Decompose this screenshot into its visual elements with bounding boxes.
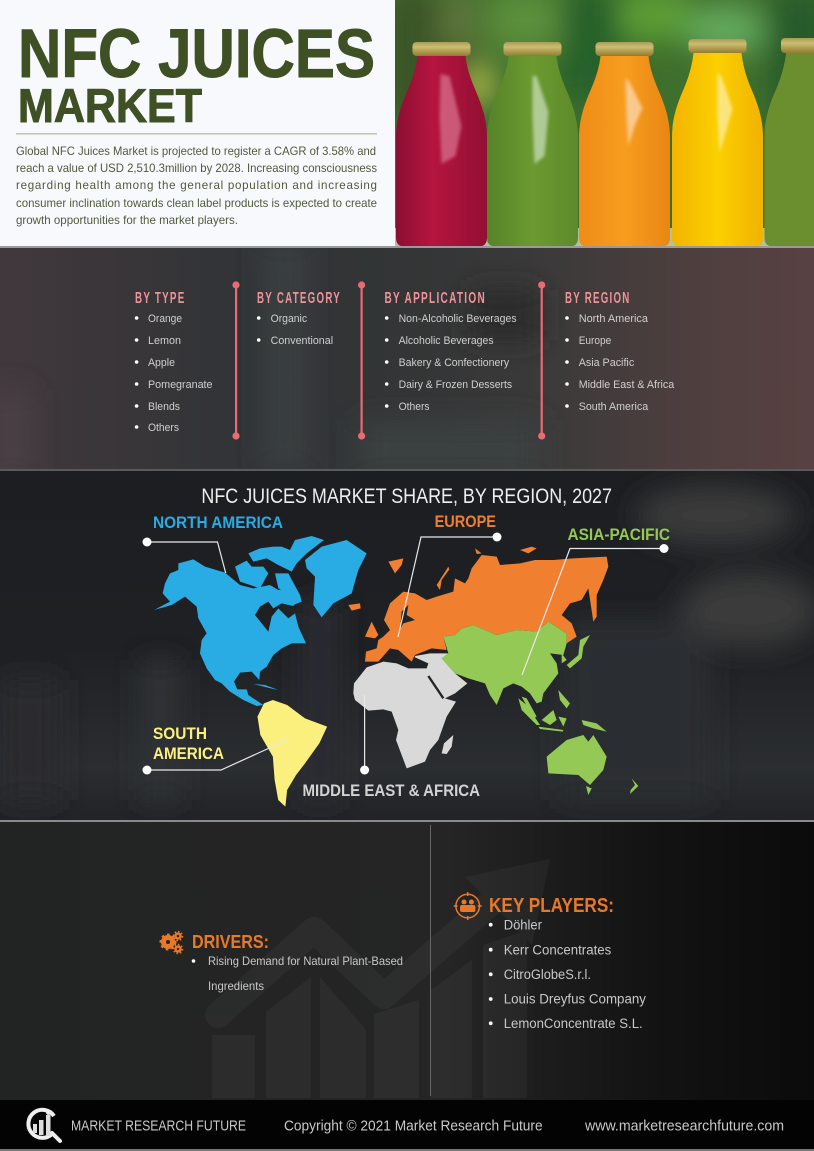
footer bbox=[0, 1100, 814, 1151]
column: by application bbox=[384, 290, 517, 413]
column: by type: Blends bbox=[148, 401, 180, 413]
intro paragraph bbox=[16, 145, 377, 227]
website: www.marketresearchfuture.com bbox=[584, 1118, 784, 1134]
brand name: MARKET RESEARCH FUTURE bbox=[71, 1118, 246, 1134]
key players block bbox=[454, 892, 646, 1031]
title: MARKET bbox=[18, 79, 202, 132]
column: by category: Organic bbox=[271, 313, 308, 325]
watermark: growth chart bbox=[212, 859, 550, 1098]
column: by type: Pomegranate bbox=[148, 379, 212, 391]
label: north america bbox=[142, 514, 283, 573]
column: by type: BY TYPE bbox=[135, 290, 186, 307]
label: asia-pacific: ASIA-PACIFIC bbox=[568, 526, 670, 544]
column: by application: Non-Alcoholic Beverages bbox=[399, 313, 517, 325]
world map bbox=[154, 536, 638, 807]
column: by region: BY REGION bbox=[565, 290, 630, 307]
map title: NFC JUICES MARKET SHARE, BY REGION, 2027 bbox=[201, 485, 612, 508]
key players list: LemonConcentrate S.L. bbox=[504, 1016, 643, 1031]
column: by type: Apple bbox=[148, 357, 175, 369]
column: by type: Others bbox=[148, 422, 179, 434]
driver list: Ingredients bbox=[208, 979, 264, 993]
title: NFC JUICES bbox=[18, 15, 375, 92]
map: asia bbox=[442, 622, 590, 705]
bottle: orange bbox=[579, 42, 670, 246]
title bbox=[18, 15, 375, 132]
bottle: green bbox=[487, 42, 578, 246]
intro paragraph: reach a value of USD 2,510.3million by 2028. Increasing consciousness bbox=[16, 162, 377, 175]
label: south america: AMERICA bbox=[153, 745, 224, 763]
panel: market segments bbox=[0, 240, 814, 480]
label: europe bbox=[398, 513, 502, 637]
copyright: Copyright © 2021 Market Research Future bbox=[284, 1118, 543, 1134]
icon: gears bbox=[161, 932, 182, 954]
column: by application: Bakery & Confectionery bbox=[399, 357, 510, 369]
drivers block bbox=[161, 932, 403, 993]
key players list bbox=[489, 918, 646, 1031]
key players list: Kerr Concentrates bbox=[504, 942, 612, 958]
intro paragraph: consumer inclination towards clean label products is expected to create bbox=[16, 197, 377, 210]
column: by category: Conventional bbox=[271, 335, 333, 347]
bottle: red bbox=[396, 42, 487, 246]
key players list: Louis Dreyfus Company bbox=[504, 992, 646, 1006]
map: middle east and africa bbox=[353, 653, 467, 768]
column: by region: Middle East & Africa bbox=[579, 379, 675, 391]
map: south america bbox=[257, 700, 327, 807]
label: europe: EUROPE bbox=[435, 513, 496, 531]
icon: logo bbox=[28, 1110, 60, 1141]
divider line 1 bbox=[232, 281, 240, 440]
intro paragraph: regarding health among the general population and increasing bbox=[16, 179, 377, 192]
intro paragraph: Global NFC Juices Market is projected to register a CAGR of 3.58% and bbox=[16, 145, 376, 158]
column: by application: BY APPLICATION bbox=[384, 290, 486, 307]
column: by region: North America bbox=[579, 313, 649, 325]
divider line 3 bbox=[538, 281, 545, 440]
center divider bbox=[430, 825, 431, 1096]
driver list bbox=[192, 954, 403, 993]
bottle: green right bbox=[764, 38, 814, 246]
header panel bbox=[0, 0, 396, 246]
column: by region bbox=[565, 290, 675, 413]
map: europe and russia bbox=[348, 547, 608, 662]
column: by application: Dairy & Frozen Desserts bbox=[399, 379, 513, 391]
intro paragraph: growth opportunities for the market players. bbox=[16, 214, 238, 227]
label: middle east and africa bbox=[302, 695, 480, 800]
icon: key players bbox=[454, 892, 482, 920]
map: north america bbox=[154, 536, 367, 706]
label: south america: SOUTH bbox=[153, 725, 207, 743]
label: middle east and africa: MIDDLE EAST & AFRICA bbox=[302, 782, 480, 800]
column: by type bbox=[135, 290, 212, 434]
panel: drivers and key players bbox=[0, 822, 814, 1100]
driver list: Rising Demand for Natural Plant-Based bbox=[208, 954, 403, 968]
label: north america: NORTH AMERICA bbox=[153, 514, 283, 532]
photo: juice bottles bbox=[385, 0, 814, 246]
column: by type: Lemon bbox=[148, 335, 181, 347]
column: by category: BY CATEGORY bbox=[257, 290, 341, 307]
key players list: Döhler bbox=[504, 918, 542, 932]
divider line 2 bbox=[358, 281, 365, 440]
column: by application: Alcoholic Beverages bbox=[399, 335, 494, 347]
label: south america bbox=[142, 725, 287, 774]
bottle: yellow bbox=[672, 39, 763, 246]
column: by type: Orange bbox=[148, 313, 182, 325]
column: by category bbox=[257, 290, 341, 347]
panel: regional map bbox=[0, 471, 814, 820]
heading: drivers: DRIVERS: bbox=[192, 932, 269, 952]
column: by region: Europe bbox=[579, 335, 611, 347]
key players list: CitroGlobeS.r.l. bbox=[504, 967, 591, 982]
column: by region: Asia Pacific bbox=[579, 357, 635, 369]
column: by region: South America bbox=[579, 401, 649, 413]
map: oceania and southeast asia bbox=[518, 690, 638, 795]
label: asia-pacific bbox=[522, 526, 670, 675]
heading: key players: KEY PLAYERS: bbox=[489, 895, 614, 917]
column: by application: Others bbox=[399, 401, 430, 413]
